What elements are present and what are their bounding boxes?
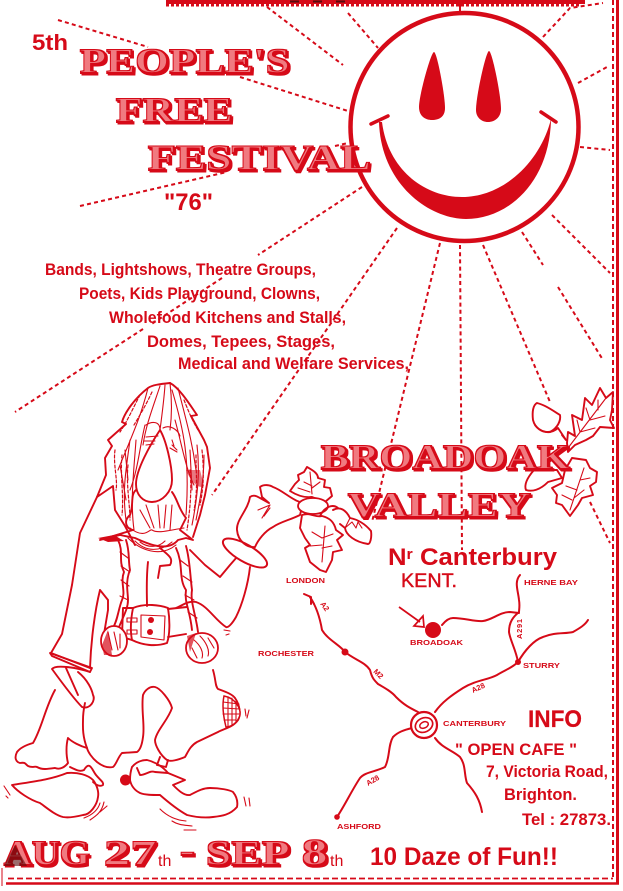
heading: Nr Canterbury Kent: r — [407, 546, 413, 563]
text block: attractions list: Medical and Welfare Services, — [178, 354, 409, 373]
info block: Brighton. — [504, 785, 577, 804]
motion lines — [4, 630, 250, 830]
roads — [304, 575, 588, 817]
heading: Nr Canterbury Kent: KENT. — [401, 571, 457, 592]
map labels: LONDON — [286, 576, 325, 585]
left shoe — [12, 766, 103, 817]
INFO heading: INFO — [528, 706, 582, 733]
icon: oak leaves and acorns at hand — [290, 467, 371, 572]
left hand — [16, 690, 87, 769]
map labels — [258, 576, 578, 831]
sun circle — [350, 13, 578, 241]
map labels: M2 — [372, 667, 385, 681]
text: "76": "76" — [164, 189, 213, 216]
text block: attractions list: Poets, Kids Playground, Clowns, — [79, 284, 320, 303]
Canterbury roundabout — [411, 712, 437, 738]
left eye — [419, 52, 445, 120]
map labels: A2 — [318, 600, 331, 613]
address: " OPEN CAFE " — [455, 740, 577, 759]
text: 10 Daze of Fun: 10 Daze of Fun!! — [370, 843, 558, 871]
heading: Nr Canterbury Kent — [388, 544, 558, 592]
raised hand — [237, 485, 301, 547]
illustration: hippie figure — [4, 383, 301, 830]
text block: attractions list: Bands, Lightshows, Theatre Groups, — [45, 260, 316, 279]
title: Broadoak Valley: BROADOAK — [321, 438, 570, 477]
map labels: ASHFORD — [337, 822, 382, 831]
date banner: - — [180, 837, 195, 866]
Broadoak marker — [399, 607, 441, 638]
map labels: HERNE BAY — [524, 578, 578, 587]
text: 5th: 5th — [32, 30, 68, 55]
date banner — [4, 833, 343, 874]
heading: Nr Canterbury Kent: Canterbury — [413, 544, 558, 571]
hair — [97, 383, 210, 545]
road map — [258, 575, 588, 831]
sun rays — [15, 0, 610, 550]
date banner: th — [330, 853, 343, 870]
icon: oak leaves and acorns at right — [525, 388, 614, 516]
date banner: 27 — [104, 834, 157, 873]
date banner: 8 — [302, 833, 328, 874]
right eye — [476, 51, 501, 122]
info block: 7, Victoria Road, — [486, 762, 608, 781]
title: People's Free Festival: PEOPLE'S — [80, 42, 290, 81]
town markers — [334, 648, 521, 820]
title: Broadoak Valley: VALLEY — [348, 486, 531, 525]
face and nose — [136, 422, 180, 502]
map labels: A28 — [470, 681, 486, 695]
map labels: ROCHESTER — [258, 649, 315, 658]
map labels: CANTERBURY — [443, 719, 506, 728]
info block — [455, 706, 611, 829]
patch — [223, 696, 240, 727]
date banner: th — [158, 853, 171, 870]
icon: smiling sun face — [350, 13, 578, 241]
braid ends — [101, 626, 218, 663]
map labels: A291 — [515, 619, 524, 639]
right shoe — [120, 757, 237, 817]
heading: Nr Canterbury Kent: N — [388, 544, 405, 571]
arm cuff — [219, 533, 271, 573]
date banner: SEP — [206, 834, 290, 873]
title: People's Free Festival: FREE — [116, 91, 233, 130]
title: People's Free Festival: FESTIVAL — [148, 138, 371, 178]
belt and buckle — [122, 605, 187, 645]
beard and moustache — [98, 490, 193, 552]
title: Broadoak Valley — [321, 438, 570, 525]
text block: attractions list: Domes, Tepees, Stages, — [147, 332, 335, 351]
map labels: BROADOAK — [410, 638, 464, 647]
smile — [379, 119, 551, 219]
trousers — [83, 670, 240, 767]
title: People's Free Festival — [80, 42, 371, 178]
body and left arm — [50, 497, 171, 708]
info block: Tel : 27873. — [522, 810, 611, 829]
braids — [112, 540, 198, 632]
date banner: AUG — [4, 834, 90, 873]
text block: attractions list: Wholefood Kitchens and Stalls, — [109, 308, 346, 327]
map labels: A28 — [364, 773, 381, 788]
map labels: STURRY — [523, 661, 560, 670]
text block: attractions list — [45, 260, 409, 373]
raised arm — [176, 550, 250, 627]
